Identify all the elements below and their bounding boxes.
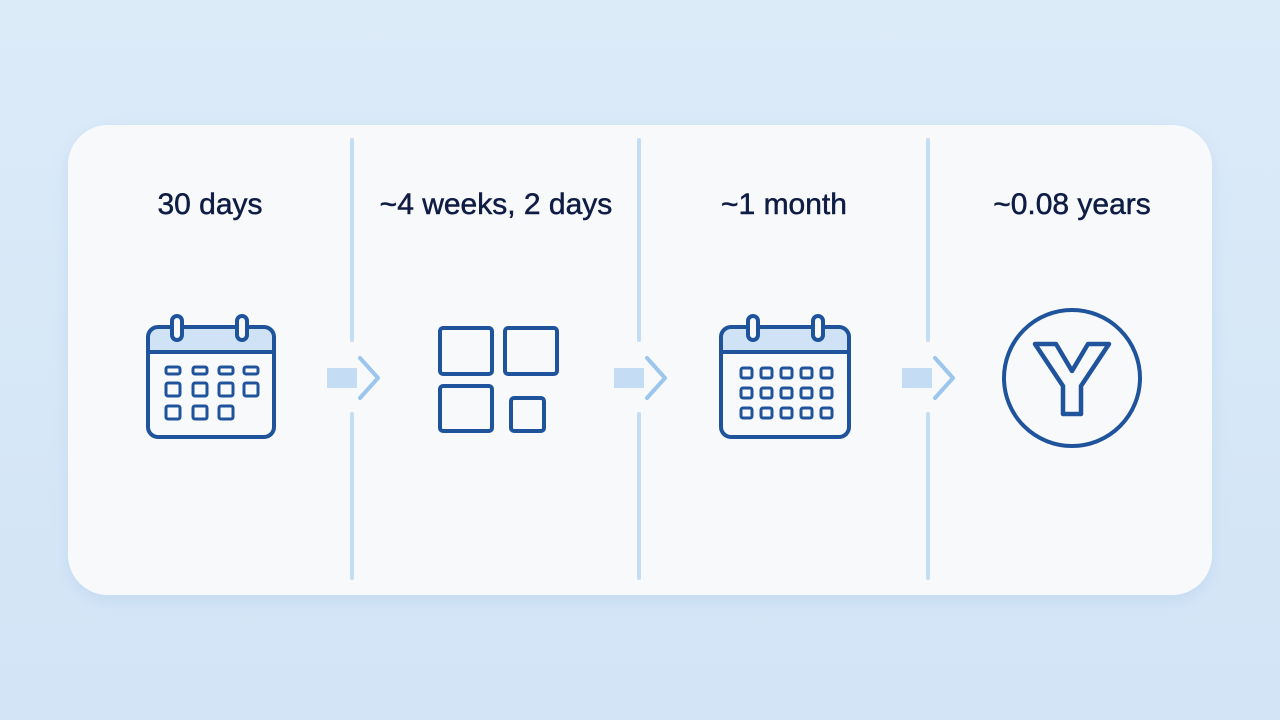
icon: calendar month (720, 316, 849, 437)
arrow 3 (902, 358, 953, 398)
icon: year circle (1004, 310, 1140, 446)
icon: weeks squares (440, 328, 557, 431)
icon: calendar 30 days (147, 316, 274, 437)
arrow 1 (327, 358, 378, 398)
card panel (68, 125, 1212, 595)
heading: ~0.08 years: ~0.08 years (993, 188, 1151, 221)
heading: ~4 weeks, 2 days: ~4 weeks, 2 days (380, 188, 612, 221)
heading: ~1 month: ~1 month (721, 188, 847, 221)
arrow 2 (614, 358, 665, 398)
heading: 30 days: 30 days (157, 188, 263, 221)
